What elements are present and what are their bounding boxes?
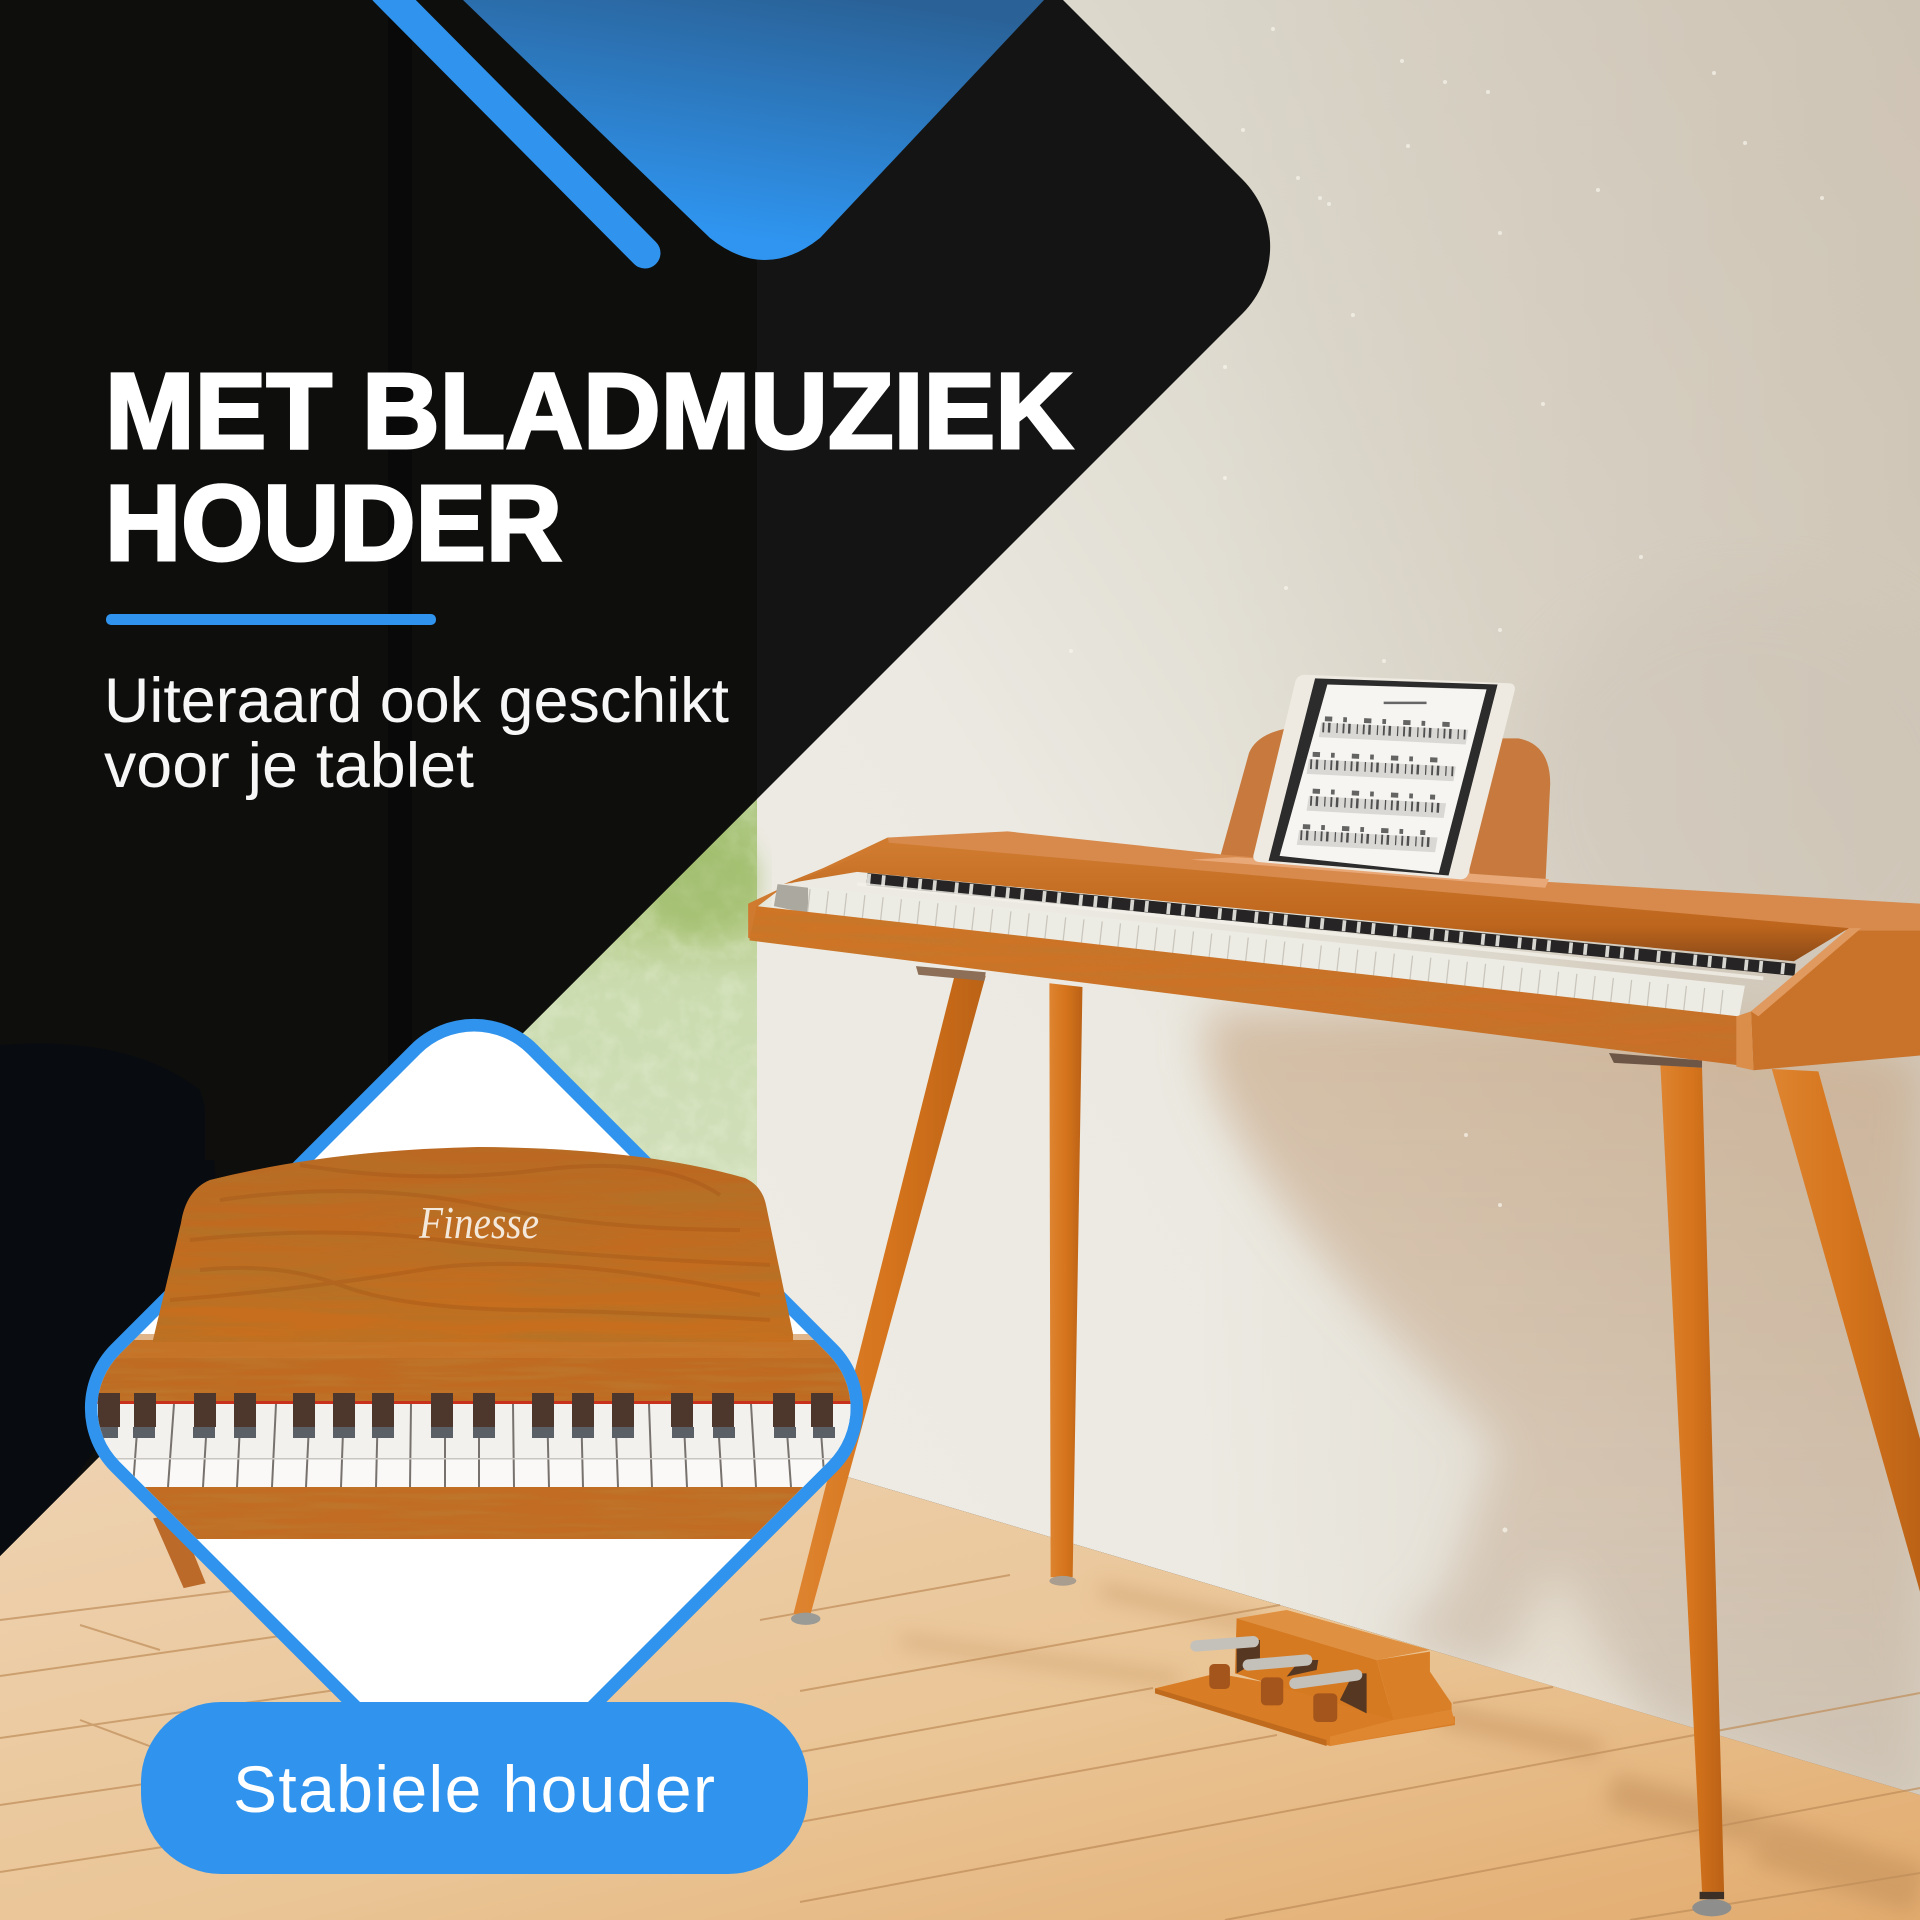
- sustain pedal unit: [1155, 1610, 1455, 1746]
- keyboard: [808, 879, 1795, 1019]
- wall dust specks: [1069, 27, 1824, 1532]
- caption pill: [141, 1702, 808, 1874]
- window with garden: [500, 790, 760, 1480]
- left cheek: [748, 838, 889, 940]
- caption text: Stabiele houder: [233, 1752, 715, 1826]
- brand logo: Finesse: [418, 1197, 539, 1248]
- front rail: [749, 906, 1739, 1065]
- blue diagonal stripe: [385, 0, 645, 253]
- piano legs: [153, 966, 1920, 1916]
- black keys: [98, 1393, 833, 1427]
- diamond product badge: [84, 1018, 864, 1702]
- blue divider bar: [106, 614, 436, 625]
- title: HOUDER: [105, 462, 562, 583]
- wall: [757, 0, 1920, 1810]
- dark diagonal panel: [0, 0, 1270, 1600]
- subtitle: Uiteraard ook geschikt: [104, 666, 729, 736]
- digital piano with tablet: [153, 675, 1920, 1916]
- right cheek: [1751, 931, 1920, 1070]
- blue triangle accent: [463, 0, 1044, 260]
- wooden floor: [0, 1450, 1920, 1920]
- music rest panel: [1218, 729, 1550, 887]
- product: keyboard body: [80, 1334, 870, 1539]
- piano top lid: [888, 831, 1920, 943]
- title: MET BLADMUZIEK: [105, 350, 1073, 471]
- fallboard behind keys: [784, 842, 1849, 961]
- plank seams: [0, 1575, 1920, 1920]
- title: [105, 350, 1073, 583]
- tablet with sheet music: [1253, 675, 1515, 879]
- subtitle: [104, 666, 729, 801]
- sheet music staves: [1297, 703, 1468, 852]
- diamond white fill: [66, 1000, 882, 1816]
- white keys: [80, 1404, 870, 1488]
- bottom wood rail: [145, 1487, 803, 1539]
- diamond blue border: [48, 982, 900, 1834]
- subtitle: voor je tablet: [104, 731, 475, 801]
- product: music stand: [150, 1145, 796, 1343]
- wood grain swirls: [170, 1165, 770, 1320]
- darkened room photo inside panel: [0, 0, 757, 1600]
- shelf for tablet: [1190, 857, 1549, 888]
- floor shadows: [900, 1590, 1920, 1890]
